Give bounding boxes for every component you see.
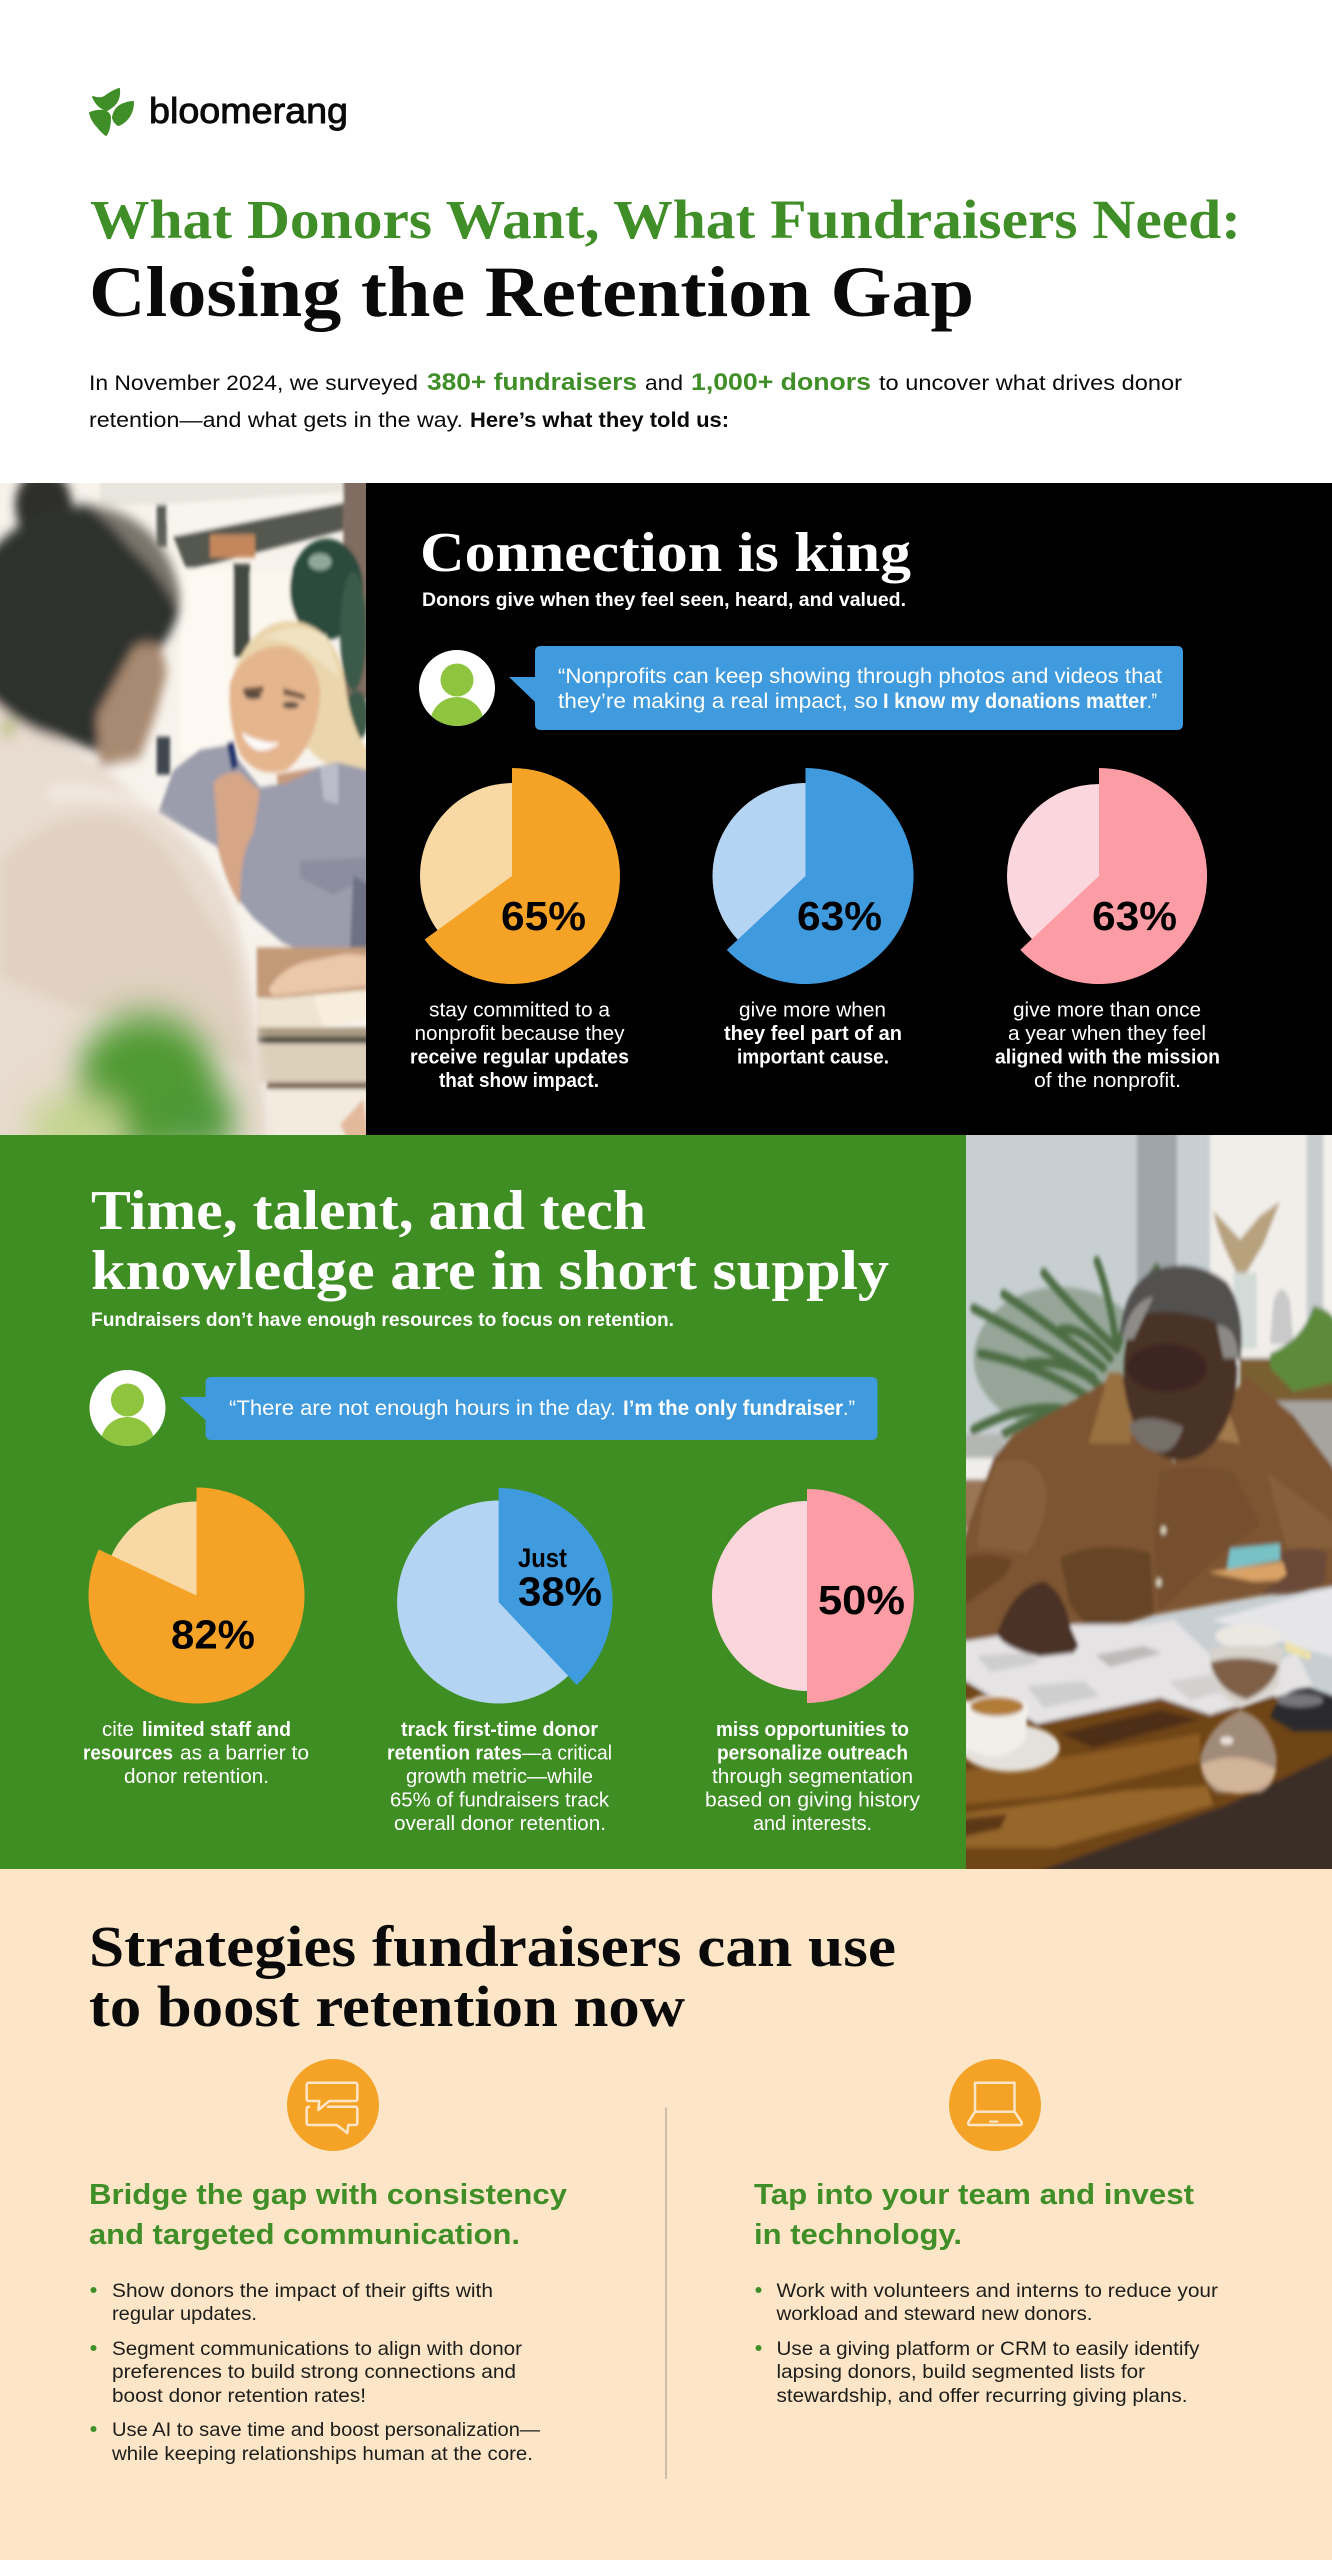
caption: 65%: nonprofit because they [414,1023,624,1045]
caption: 65% [410,1000,629,1092]
title [89,189,1241,332]
photo: woman smiling across table [0,483,366,1135]
caption: 63% mission: of the nonprofit. [1034,1070,1181,1092]
chart: pie 65%: 65% [501,893,586,939]
caption: 50% [705,1719,920,1835]
intro text: retention—and what gets in the way. [89,409,463,432]
chart: pie 82% [89,1488,305,1704]
caption: 65%: receive regular updates [410,1046,629,1068]
bullet list: Use a giving platform or CRM to easily identify [776,2338,1200,2360]
column heading: Tap into your team and invest [754,2179,1194,2211]
callout: donor quote [509,646,1183,730]
caption: 50%: personalize outreach [717,1742,908,1764]
column heading: in technology. [754,2219,962,2251]
heading [91,1180,889,1302]
chart: pie 50%: 50% [818,1577,905,1623]
bullet list: while keeping relationships human at the core. [111,2443,533,2465]
heading: Strategies fundraisers can use [89,1914,896,1979]
caption: 38%: —a critical [522,1742,612,1764]
intro text [89,369,1182,432]
caption: 65%: stay committed to a [429,1000,611,1022]
caption: 63% mission: aligned with the mission [995,1046,1220,1068]
title: Closing the Retention Gap [89,252,974,332]
column: consistency [89,2179,567,2465]
icon: chat bubbles [287,2059,379,2151]
caption: 82%: cite [102,1719,134,1741]
callout: fundraiser quote [180,1377,878,1440]
heading: knowledge are in short supply [91,1240,889,1302]
callout: donor quote: they’re making a real impact, so [558,690,878,713]
intro text: 1,000+ donors [691,369,871,396]
chart: pie 50% [712,1489,914,1703]
bullet list: Use AI to save time and boost personalization— [112,2419,541,2441]
panel: header [0,0,1332,483]
caption: 50%: through segmentation [712,1766,913,1788]
bullet list: preferences to build strong connections and [112,2361,516,2383]
bullet list [756,2280,1219,2407]
caption: 65%: that show impact. [439,1070,599,1092]
caption: 38%: growth metric—while [406,1766,593,1788]
caption: 38%: 65% of fundraisers track [390,1790,610,1812]
caption: 63% cause: give more when [739,1000,886,1022]
bullet list [90,2280,541,2465]
bullet list: lapsing donors, build segmented lists for [776,2361,1146,2383]
bullet list: boost donor retention rates! [112,2385,366,2407]
callout: donor quote: I know my donations matter [883,690,1147,713]
caption: 82%: limited staff and [142,1719,291,1741]
caption: 38% [387,1719,612,1835]
column: technology [754,2179,1219,2407]
chart: pie 63% cause: 63% [797,893,882,939]
caption: 63% mission: give more than once [1013,1000,1201,1022]
chart: pie 63% mission [1007,768,1207,984]
panel: time, talent, tech [0,1125,1332,1879]
callout: donor quote: “Nonprofits can keep showing through photos and videos that [558,665,1162,688]
caption: 82%: as a barrier to [180,1742,309,1764]
caption: 50%: and interests. [753,1813,872,1835]
photo: man reviewing papers at table [966,1135,1332,1869]
divider [666,2108,667,2479]
chart: pie just 38%: Just [518,1543,567,1573]
caption: 38%: track first-time donor [401,1719,598,1741]
callout: fundraiser quote: .” [843,1397,855,1420]
bullet list: workload and steward new donors. [775,2303,1092,2325]
caption: 82%: donor retention. [124,1766,269,1788]
column heading [89,2179,567,2251]
caption: 63% cause: important cause. [737,1046,889,1068]
title: What Donors Want, What Fundraisers Need: [90,189,1241,250]
logo: bloomerang: bloomerang [149,90,348,131]
subheading: Fundraisers don’t have enough resources to focus on retention. [91,1310,674,1331]
heading: Connection is king [420,522,911,584]
chart: pie 63% mission: 63% [1092,893,1177,939]
column heading [754,2179,1194,2251]
bullet list: Segment communications to align with donor [112,2338,523,2360]
icon: laptop [949,2059,1041,2151]
avatar: fundraiser [90,1370,166,1446]
caption: 38%: retention rates [387,1742,522,1764]
panel: strategies [0,1869,1332,2560]
logo: bloomerang [90,89,348,135]
intro text: to uncover what drives donor [879,372,1182,395]
chart: pie just 38% [397,1488,613,1704]
caption: 82%: resources [83,1742,173,1764]
caption: 82% [83,1719,309,1788]
caption: 50%: based on giving history [705,1790,920,1812]
intro text: Here’s what they told us: [470,409,729,432]
intro text: 380+ fundraisers [427,369,637,396]
heading [89,1914,896,2039]
heading: Time, talent, and tech [91,1180,646,1242]
caption: 38%: overall donor retention. [394,1813,606,1835]
intro text: and [645,372,683,395]
subheading: Donors give when they feel seen, heard, and valued. [422,590,906,611]
chart: pie 82%: 82% [171,1612,255,1658]
caption: 63% cause [724,1000,902,1068]
column heading: and targeted communication. [89,2219,520,2251]
callout: donor quote: .” [1147,690,1157,713]
bullet list: Work with volunteers and interns to reduce your [776,2280,1219,2302]
panel: connection is king [0,469,1332,1162]
callout: fundraiser quote: “There are not enough hours in the day. [229,1397,616,1420]
column heading: Bridge the gap with consistency [89,2179,567,2211]
chart: pie just 38%: 38% [518,1568,602,1614]
heading: to boost retention now [89,1974,685,2039]
caption: 63% cause: they feel part of an [724,1023,902,1045]
callout: fundraiser quote: I’m the only fundraiser [623,1397,843,1420]
caption: 63% mission: a year when they feel [1008,1023,1206,1045]
bullet list: Show donors the impact of their gifts with [112,2280,493,2302]
caption: 63% mission [995,1000,1220,1092]
chart: pie 63% cause [712,768,914,984]
bullet list: regular updates. [112,2303,257,2325]
caption: 50%: miss opportunities to [716,1719,909,1741]
bullet list: stewardship, and offer recurring giving plans. [776,2385,1188,2407]
intro text: In November 2024, we surveyed [89,372,418,395]
avatar: donor [419,650,495,726]
chart: pie 65% [420,768,620,984]
